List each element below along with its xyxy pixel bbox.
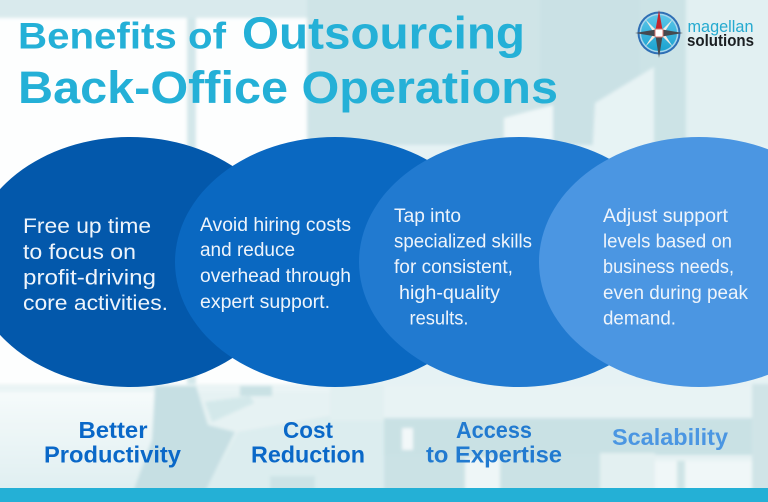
panel: better productivity circle <box>0 137 290 387</box>
logo: magellan solutions <box>635 10 754 58</box>
logo text: magellan <box>688 18 754 36</box>
footer bar <box>0 488 768 502</box>
text: expertise description: Tap into <box>394 206 461 227</box>
text: cost description: overhead through <box>200 266 351 287</box>
title line 1: Outsourcing <box>242 8 525 58</box>
text: scalability description: Adjust support <box>603 206 729 227</box>
text: cost description: expert support. <box>200 292 330 313</box>
label: cost reduction: Cost <box>283 417 333 443</box>
text: scalability description: business needs, <box>603 257 734 278</box>
text: scalability description: levels based on <box>603 232 732 252</box>
logo text: solutions <box>687 32 754 50</box>
text: productivity description: profit-driving <box>23 266 156 290</box>
title line 1: Benefits of <box>18 16 227 56</box>
label: access to expertise: to Expertise <box>426 442 562 468</box>
text: scalability description <box>603 206 748 330</box>
text: cost description: Avoid hiring costs <box>200 215 351 236</box>
text: productivity description: core activities. <box>23 291 168 315</box>
label: better productivity <box>44 417 181 468</box>
label: scalability: Scalability <box>612 424 728 450</box>
text: cost description <box>200 215 351 313</box>
logo text <box>687 18 754 50</box>
label: access to expertise: Access <box>456 417 532 443</box>
panel: access to expertise circle <box>359 137 679 387</box>
label: access to expertise <box>426 417 562 468</box>
text: scalability description: even during peak <box>603 283 748 304</box>
text: expertise description: high-quality <box>399 283 501 304</box>
text: expertise description <box>394 206 532 330</box>
text: productivity description: to focus on <box>23 240 136 264</box>
text: productivity description: Free up time <box>23 214 151 238</box>
text: scalability description: demand. <box>603 308 676 330</box>
label: cost reduction <box>251 417 365 468</box>
icon: compass <box>635 10 683 58</box>
text: cost description: and reduce <box>200 240 295 261</box>
panel: scalability circle <box>539 137 768 387</box>
panel: cost reduction circle <box>175 137 495 387</box>
text: productivity description <box>23 214 168 315</box>
label: better productivity: Better <box>78 417 148 443</box>
text: expertise description: specialized skills <box>394 232 532 252</box>
title line 1 <box>18 8 525 58</box>
text: expertise description: for consistent, <box>394 257 513 278</box>
label: cost reduction: Reduction <box>251 442 365 468</box>
text: expertise description: results. <box>410 308 468 330</box>
title line 2: Back-Office Operations <box>18 62 558 113</box>
label: better productivity: Productivity <box>44 442 181 468</box>
